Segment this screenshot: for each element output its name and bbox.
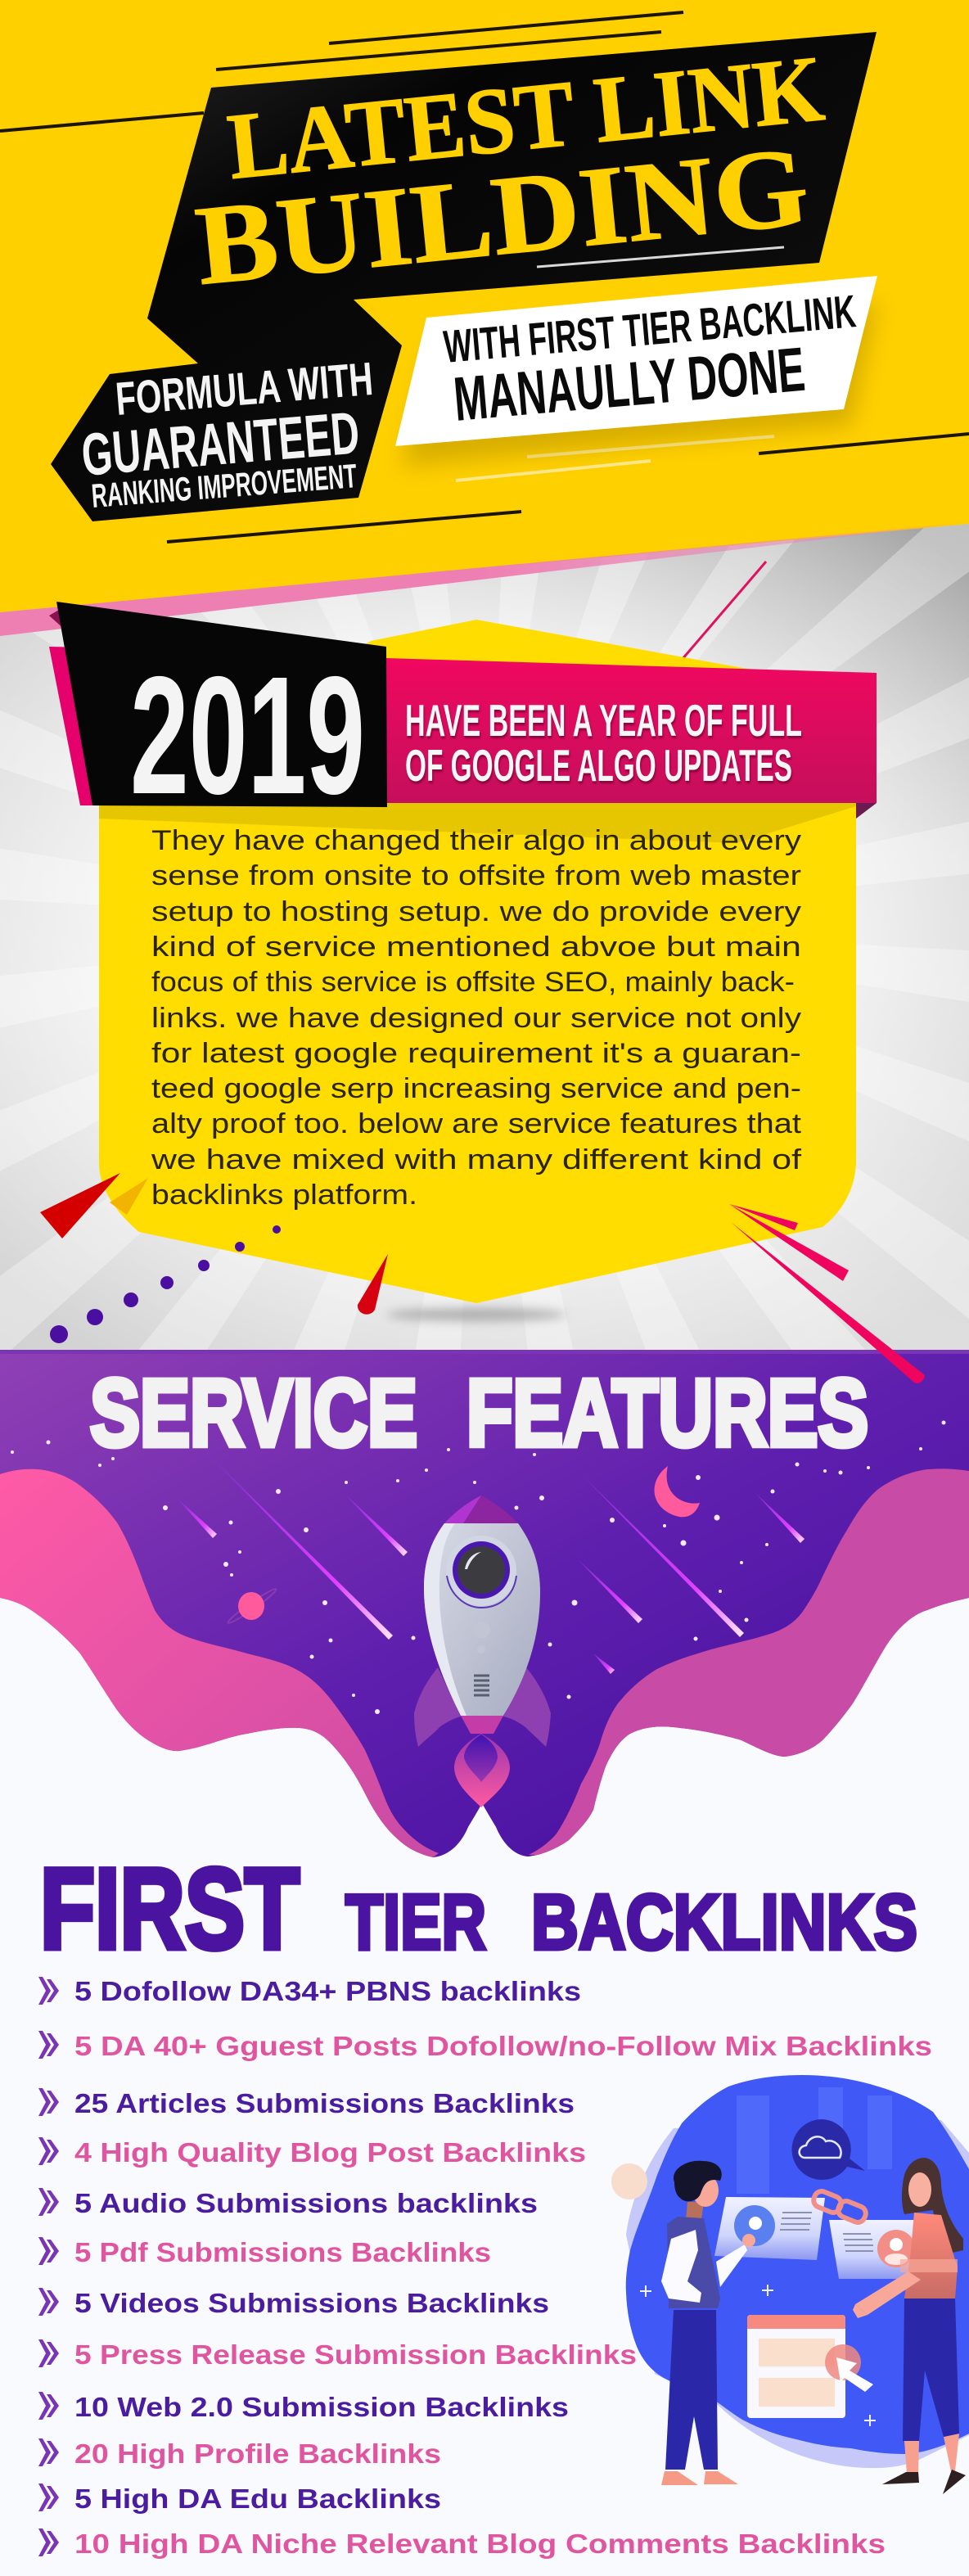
panel: grey sunburst background <box>0 516 969 1351</box>
web page card <box>747 2315 845 2418</box>
list: backlink items: 25 Articles Submissions Backlinks <box>74 2088 575 2118</box>
tag: formula with guaranteed ranking improvement: RANKING IMPROVEMENT <box>90 457 358 515</box>
title: latest link: LATEST LINK <box>223 36 828 199</box>
meteors <box>176 1450 804 1674</box>
list: backlink items: 10 High DA Niche Relevant Blog Comments Backlinks <box>74 2529 886 2559</box>
card left <box>714 2197 825 2260</box>
heading: service features: FEATURES <box>466 1360 868 1466</box>
ribbon: pink heading band <box>386 658 877 819</box>
list: backlink items: 5 Audio Submissions backlinks <box>74 2188 538 2218</box>
person: woman <box>853 2158 966 2494</box>
accents: pink spikes <box>729 1204 849 1281</box>
list: backlink items: 5 High DA Edu Backlinks <box>74 2484 441 2514</box>
icon: cloud bubble <box>792 2119 865 2180</box>
icon: ringed planet <box>226 1586 278 1626</box>
panel: yellow text shield <box>99 620 856 1321</box>
text block: intro paragraph: They have changed their algo in about every <box>151 825 801 856</box>
icon: rocket <box>414 1496 551 1807</box>
list: backlink items: 5 DA 40+ Gguest Posts Dofollow/no-Follow Mix Backlinks <box>74 2031 932 2061</box>
text block: intro paragraph: focus of this service is offsite SEO, mainly back- <box>151 967 795 998</box>
accent: large pink spike <box>731 1222 925 1383</box>
tag: formula with guaranteed ranking improvement: GUARANTEED <box>79 399 362 489</box>
heading: service features <box>90 1360 868 1466</box>
icon: cursor <box>825 2344 873 2392</box>
year 2019: 2019 <box>130 642 365 829</box>
thin pink accent line <box>677 562 766 665</box>
text block: intro paragraph: we have mixed with many different kind of <box>151 1144 802 1175</box>
text block: intro paragraph <box>151 825 802 1211</box>
accent: red spike <box>358 1254 388 1315</box>
heading: first tier backlinks <box>40 1844 917 1973</box>
list: backlink items: 4 High Quality Blog Post Backlinks <box>74 2137 586 2168</box>
heading: algo updates <box>405 695 802 791</box>
text block: intro paragraph: backlinks platform. <box>151 1180 417 1211</box>
accents: red and orange triangles <box>40 1173 148 1238</box>
pink blob right <box>529 1468 969 1855</box>
white page background below blobs <box>0 1598 969 1874</box>
text block: intro paragraph: setup to hosting setup. we do provide every <box>151 896 801 927</box>
tag: formula with guaranteed ranking improvement: FORMULA WITH <box>114 353 375 426</box>
heading: first tier backlinks: TIER <box>345 1879 486 1966</box>
text block: intro paragraph: teed google serp increasing service and pen- <box>151 1073 801 1104</box>
list: backlink items: 5 Press Release Submission Backlinks <box>74 2339 637 2370</box>
icon: chain link <box>811 2189 868 2225</box>
pink blob left <box>0 1469 439 1857</box>
list: backlink items: 5 Dofollow DA34+ PBNS backlinks <box>74 1976 581 2006</box>
text block: intro paragraph: alty proof too. below are service features that <box>151 1108 802 1139</box>
tag: formula with guaranteed ranking improvement <box>79 353 375 515</box>
stars <box>11 1421 946 1714</box>
text block: intro paragraph: sense from onsite to offsite from web master <box>151 860 801 891</box>
list: backlink items: 10 Web 2.0 Submission Backlinks <box>74 2392 569 2422</box>
ribbon: pink left tail <box>49 647 92 805</box>
panel: purple space section <box>0 1350 969 1874</box>
panel: black title ribbon <box>51 32 877 521</box>
panel: white banner <box>395 276 877 446</box>
ribbon: black year block <box>49 602 387 829</box>
heading: service features: SERVICE <box>90 1360 417 1466</box>
list: backlink items <box>38 1976 932 2559</box>
heading: first tier backlinks: FIRST <box>40 1844 300 1973</box>
title: building: BUILDING <box>191 123 814 309</box>
card right <box>829 2220 933 2279</box>
text block: intro paragraph: kind of service mentioned abvoe but main <box>151 932 801 963</box>
text block: intro paragraph: for latest google requirement it's a guaran- <box>151 1038 801 1069</box>
list: backlink items: 20 High Profile Backlinks <box>74 2438 441 2469</box>
list: backlink items: 5 Pdf Submissions Backlinks <box>74 2237 491 2267</box>
shadow under white banner <box>401 303 877 467</box>
list: backlink items: 5 Videos Submissions Backlinks <box>74 2288 549 2318</box>
accents: purple dots <box>50 1225 281 1343</box>
icon: crescent moon <box>655 1466 700 1517</box>
panel: yellow header background <box>0 0 969 636</box>
text block: intro paragraph: links. we have designed our service not only <box>151 1003 801 1034</box>
sparkles <box>640 2285 876 2426</box>
illustration: people linking web pages <box>611 2075 969 2494</box>
person: man <box>661 2161 755 2485</box>
decorative black and light lines <box>0 12 969 542</box>
